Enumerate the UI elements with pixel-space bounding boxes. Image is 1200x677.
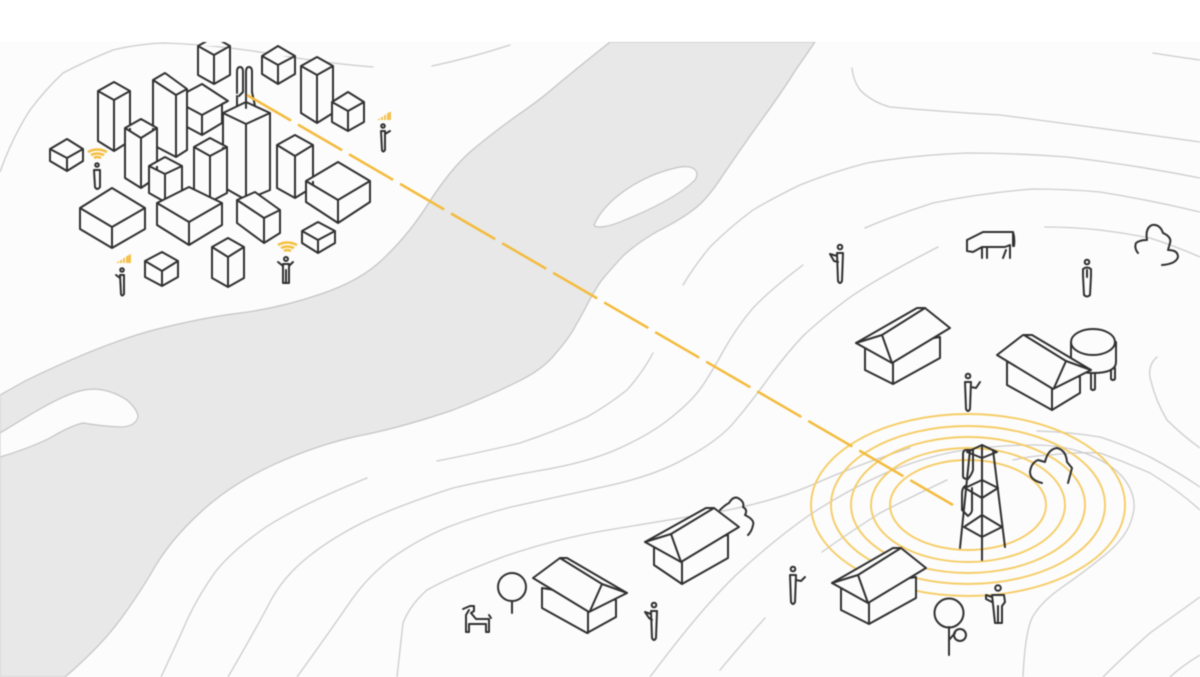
house: upper left <box>856 308 950 384</box>
dashed link from city to tower <box>247 95 953 505</box>
villagers <box>645 245 1091 640</box>
house: upper right <box>997 335 1091 410</box>
river island: left <box>0 389 138 457</box>
tree near tower <box>1030 448 1072 483</box>
city people <box>94 124 390 296</box>
cow <box>967 232 1014 258</box>
river <box>0 42 815 677</box>
river island: centre <box>594 167 697 227</box>
house: near tower <box>832 548 926 624</box>
house: lower middle <box>645 508 739 584</box>
city buildings <box>50 37 370 287</box>
water tank <box>1071 329 1116 390</box>
tree behind middle house <box>720 498 753 535</box>
house: lower left <box>533 558 627 633</box>
round tree: near tower <box>934 598 966 655</box>
wifi and signal icons <box>88 112 391 263</box>
cell tower <box>960 445 1005 560</box>
round tree: left <box>498 573 526 613</box>
dog <box>463 606 491 632</box>
top white band <box>0 0 1200 42</box>
signal rings around tower <box>811 414 1125 596</box>
tree: far right <box>1135 225 1178 265</box>
